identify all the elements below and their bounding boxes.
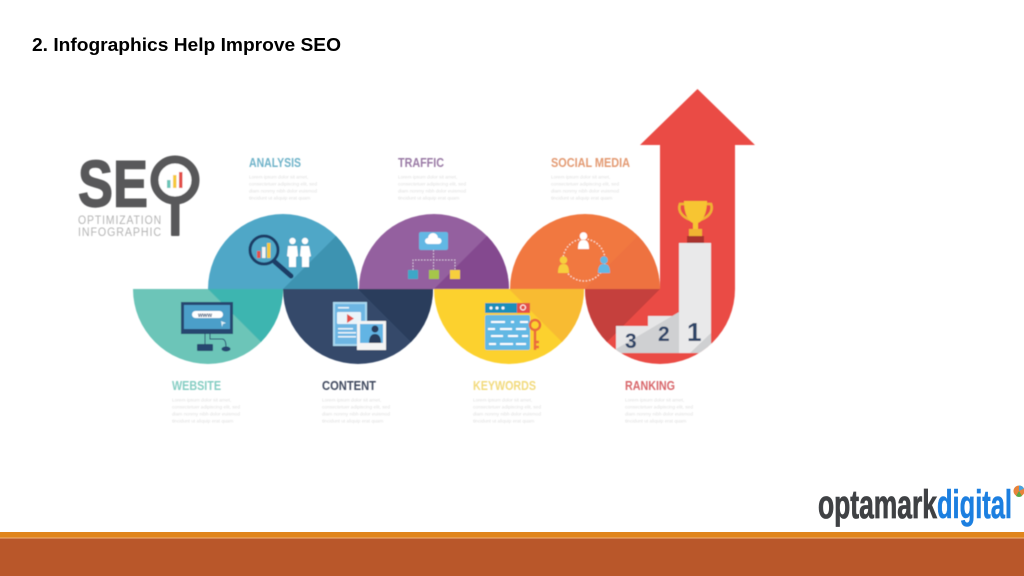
text block: social media: consectetuer adipiscing elit, sed — [551, 182, 619, 188]
text block: website — [172, 398, 240, 424]
text block: social media — [551, 174, 619, 202]
panel: website — [133, 289, 283, 364]
SEO logo: SE — [78, 146, 148, 220]
heading: content: CONTENT — [322, 379, 376, 393]
text block: social media: tincidunt ut aliquip erat quam — [551, 196, 612, 202]
icon: computer — [181, 302, 233, 352]
icon: community — [558, 232, 610, 281]
icon: podium: 2 — [658, 323, 670, 346]
text block: traffic: consectetuer adipiscing elit, sed — [398, 182, 466, 188]
text block: keywords: consectetuer adipiscing elit, sed — [473, 404, 541, 410]
heading: ranking: RANKING — [625, 379, 675, 393]
heading: social media: SOCIAL MEDIA — [551, 156, 630, 170]
text block: website: diam nonmy nibh dolor euismod — [172, 412, 240, 418]
text block: analysis: consectetuer adipiscing elit, sed — [249, 182, 317, 188]
SEO logo — [78, 146, 196, 239]
text block: traffic: tincidunt ut aliquip erat quam — [398, 196, 459, 202]
text block: keywords: diam nonmy nibh dolor euismod — [473, 412, 541, 418]
text block: keywords: tincidunt ut aliquip erat quam — [473, 418, 534, 424]
text block: analysis — [249, 174, 317, 202]
text block: content: tincidunt ut aliquip erat quam — [322, 418, 383, 424]
heading: analysis: ANALYSIS — [249, 156, 301, 170]
panel: social media — [510, 214, 660, 289]
icon: document and photo — [333, 302, 386, 350]
text block: website: consectetuer adipiscing elit, sed — [172, 404, 240, 410]
text block: analysis: Lorem ipsum dolor sit amet, — [249, 174, 308, 180]
heading: traffic: TRAFFIC — [398, 156, 444, 170]
text block: ranking: consectetuer adipiscing elit, sed — [625, 404, 693, 410]
text block: website: tincidunt ut aliquip erat quam — [172, 418, 233, 424]
text block: content: Lorem ipsum dolor sit amet, — [322, 398, 381, 404]
footer band — [0, 532, 1024, 576]
text block: content — [322, 398, 390, 424]
icon: magnifier and people — [250, 236, 311, 276]
arrow: rising red — [640, 89, 755, 289]
icon: cloud network — [408, 232, 460, 279]
text block: social media: Lorem ipsum dolor sit amet, — [551, 174, 610, 180]
text block: traffic: diam nonmy nibh dolor euismod — [398, 188, 466, 194]
SEO logo: INFOGRAPHIC — [78, 227, 162, 239]
logo: optamark digital: optamark — [818, 483, 937, 527]
icon: logo leaf — [1014, 485, 1024, 497]
heading: keywords: KEYWORDS — [473, 379, 536, 393]
panel: ranking — [585, 243, 735, 364]
text block: ranking — [625, 398, 693, 424]
icon: podium — [616, 243, 711, 353]
panel: content — [283, 289, 433, 364]
text block: social media: diam nonmy nibh dolor euismod — [551, 188, 619, 194]
text block: keywords — [473, 398, 541, 424]
icon: podium: 3 — [625, 330, 637, 353]
icon: browser and key — [485, 303, 540, 350]
icon: trophy — [679, 201, 712, 243]
text block: keywords: Lorem ipsum dolor sit amet, — [473, 398, 532, 404]
text block: content: diam nonmy nibh dolor euismod — [322, 412, 390, 418]
text block: website: Lorem ipsum dolor sit amet, — [172, 398, 231, 404]
SEO logo: OPTIMIZATION — [78, 215, 162, 227]
icon: computer: www — [197, 313, 212, 319]
panel: keywords — [434, 289, 584, 364]
text block: traffic: Lorem ipsum dolor sit amet, — [398, 174, 457, 180]
text block: analysis: tincidunt ut aliquip erat quam — [249, 196, 310, 202]
text block: ranking: Lorem ipsum dolor sit amet, — [625, 398, 684, 404]
panel: traffic — [359, 214, 509, 289]
heading: website: WEBSITE — [172, 379, 221, 393]
panel: analysis — [208, 214, 358, 289]
icon: podium: 1 — [687, 317, 701, 347]
text block: content: consectetuer adipiscing elit, sed — [322, 404, 390, 410]
infographic — [78, 89, 755, 424]
text block: analysis: diam nonmy nibh dolor euismod — [249, 188, 317, 194]
text block: ranking: diam nonmy nibh dolor euismod — [625, 412, 693, 418]
title: 2. Infographics Help Improve SEO — [32, 34, 341, 55]
text block: traffic — [398, 174, 466, 202]
text block: ranking: tincidunt ut aliquip erat quam — [625, 418, 686, 424]
